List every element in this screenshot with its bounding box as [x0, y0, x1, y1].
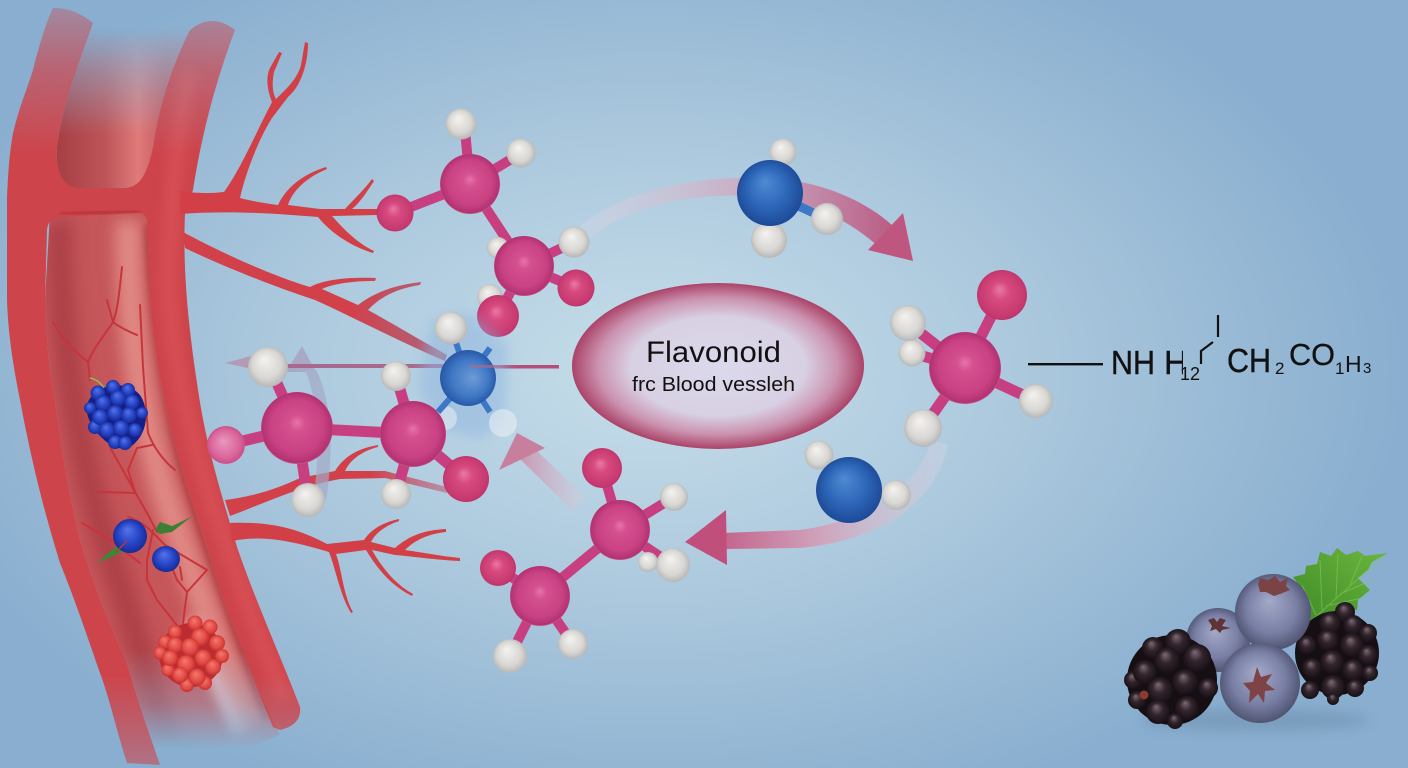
lower lumen	[45, 213, 280, 744]
molecule: left pink	[207, 347, 489, 517]
chemical formula: H	[1345, 351, 1362, 377]
branching capillaries outside the vessel	[180, 42, 460, 613]
icon: small blueberries with leaves	[97, 517, 191, 572]
fourth branch	[230, 519, 460, 613]
molecule: central blue with motion halo	[418, 312, 517, 440]
icon: blue raspberry in vessel	[84, 378, 148, 450]
chemical formula: NH	[1111, 344, 1155, 381]
icon: front blueberry	[1220, 643, 1300, 723]
chemical formula: 2	[1275, 359, 1284, 378]
icon: left blackberry	[1124, 629, 1218, 729]
vessel wall with connecting band	[7, 8, 300, 765]
blood vessel cross-section	[7, 8, 310, 768]
heading: Flavonoid: Flavonoid	[646, 336, 781, 369]
icon: berry cluster	[1124, 548, 1388, 731]
chemical formula: CO	[1289, 337, 1335, 372]
icon: top blueberry	[1235, 574, 1311, 650]
chemical formula: 1	[1335, 359, 1344, 378]
arrow: pale vertical arrow behind left molecule	[286, 346, 331, 505]
molecule: bottom blue	[804, 440, 911, 523]
arrow: horizontal arrow to the left	[225, 351, 559, 373]
chemical formula: CH	[1227, 342, 1271, 379]
icon: leaf	[1293, 548, 1388, 623]
molecule: bottom pink	[480, 448, 690, 673]
arrow: top circular arrow	[575, 178, 913, 261]
inner capillary network	[53, 267, 207, 633]
second branch	[183, 232, 447, 361]
molecule: top blue	[737, 138, 843, 258]
icon: red raspberry in vessel	[154, 616, 229, 692]
chemical formula: 12	[1180, 364, 1200, 384]
sub-label: frc Blood vessleh	[632, 374, 795, 396]
molecule: top pink	[376, 108, 594, 337]
chemical formula: H	[1164, 344, 1188, 381]
capillaries and berries inside the vessel	[53, 267, 229, 692]
central label oval	[572, 283, 864, 449]
chemical formula	[1028, 315, 1371, 384]
molecule: right pink	[890, 270, 1053, 447]
upper lumen	[57, 23, 190, 190]
chemical formula: 3	[1363, 360, 1371, 377]
third branch	[225, 445, 447, 516]
arrow: bottom circular arrow	[685, 440, 948, 565]
upper branch	[180, 42, 378, 253]
arrow: lower left return arrow	[499, 433, 585, 510]
icon: right blackberry	[1295, 602, 1379, 705]
icon: back blueberry	[1186, 608, 1250, 672]
